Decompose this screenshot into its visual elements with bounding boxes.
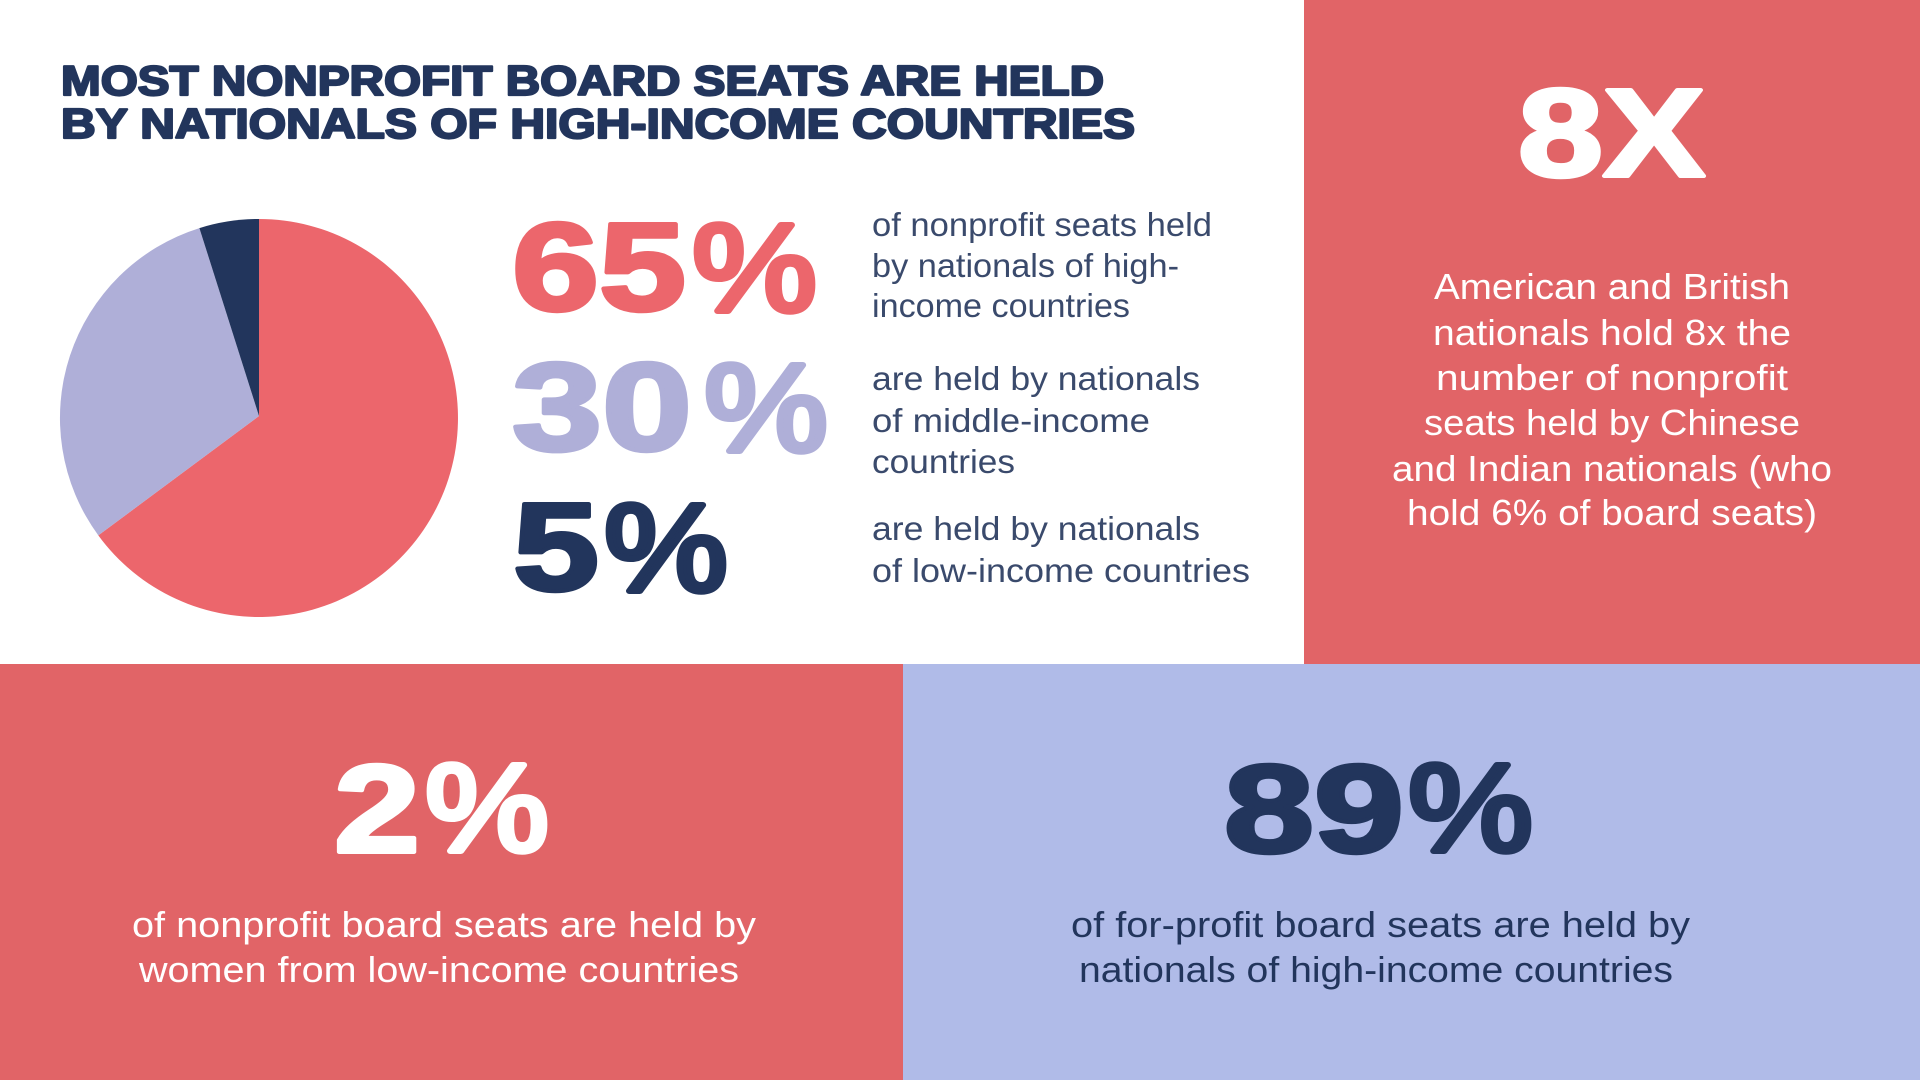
- text: 8X description: [1392, 266, 1832, 533]
- text: 8X description: and Indian nationals (who: [1392, 448, 1832, 489]
- panel: 89% callout: [903, 664, 1920, 1080]
- stat: 89%: 89: [1224, 740, 1404, 879]
- label: 65% description: income countries: [872, 287, 1130, 324]
- stat: 2%: %: [425, 739, 549, 878]
- stat: 89%: [1224, 739, 1533, 879]
- title: BY NATIONALS OF HIGH-INCOME COUNTRIES: [61, 100, 1135, 147]
- stat: 65%: %: [692, 199, 817, 338]
- text: 8X description: number of nonprofit: [1436, 357, 1788, 398]
- text: 8X description: seats held by Chinese: [1424, 402, 1800, 443]
- panel: pie chart and statistics: [60, 57, 1250, 618]
- title: MOST NONPROFIT BOARD SEATS ARE HELD: [61, 57, 1104, 104]
- text: 8X description: American and British: [1434, 266, 1790, 307]
- text: 8X description: hold 6% of board seats): [1407, 492, 1817, 533]
- text: 89% description: [1071, 904, 1690, 990]
- stat: 89%: %: [1408, 739, 1533, 878]
- stat: 2%: 2: [334, 740, 420, 879]
- stat: 8X: 8X: [1518, 64, 1705, 203]
- pie chart: [60, 219, 458, 617]
- label: 5% description: [872, 510, 1250, 589]
- label: 65% description: of nonprofit seats held: [872, 206, 1212, 243]
- panel: 2% callout: [0, 664, 903, 1080]
- text: 2% description: women from low-income countries: [138, 949, 739, 990]
- text: 2% description: of nonprofit board seats are held by: [132, 904, 756, 945]
- title: [61, 57, 1135, 147]
- label: 30% description: countries: [872, 443, 1015, 480]
- text: 2% description: [132, 904, 756, 990]
- stat: 30%: [512, 338, 828, 478]
- stat: 5%: [513, 478, 728, 618]
- label: 30% description: are held by nationals: [872, 360, 1200, 397]
- stat: 65%: 65: [512, 198, 686, 337]
- label: 30% description: of middle-income: [872, 402, 1150, 439]
- text: 8X description: nationals hold 8x the: [1433, 312, 1791, 353]
- stat: 5%: %: [604, 479, 728, 618]
- text: 89% description: nationals of high-income countries: [1079, 949, 1673, 990]
- stat: 2%: [334, 739, 549, 879]
- stat: 5%: 5: [513, 478, 599, 617]
- label: 5% description: are held by nationals: [872, 510, 1200, 547]
- text: 89% description: of for-profit board seats are held by: [1071, 904, 1690, 945]
- stat: 30%: 30: [512, 338, 692, 477]
- label: 65% description: by nationals of high-: [872, 247, 1179, 284]
- label: 65% description: [872, 206, 1212, 324]
- label: 5% description: of low-income countries: [872, 552, 1250, 589]
- label: 30% description: [872, 360, 1200, 480]
- stat: 65%: [512, 198, 817, 338]
- stat: 30%: %: [704, 339, 828, 478]
- panel: 8X callout: [1304, 0, 1920, 664]
